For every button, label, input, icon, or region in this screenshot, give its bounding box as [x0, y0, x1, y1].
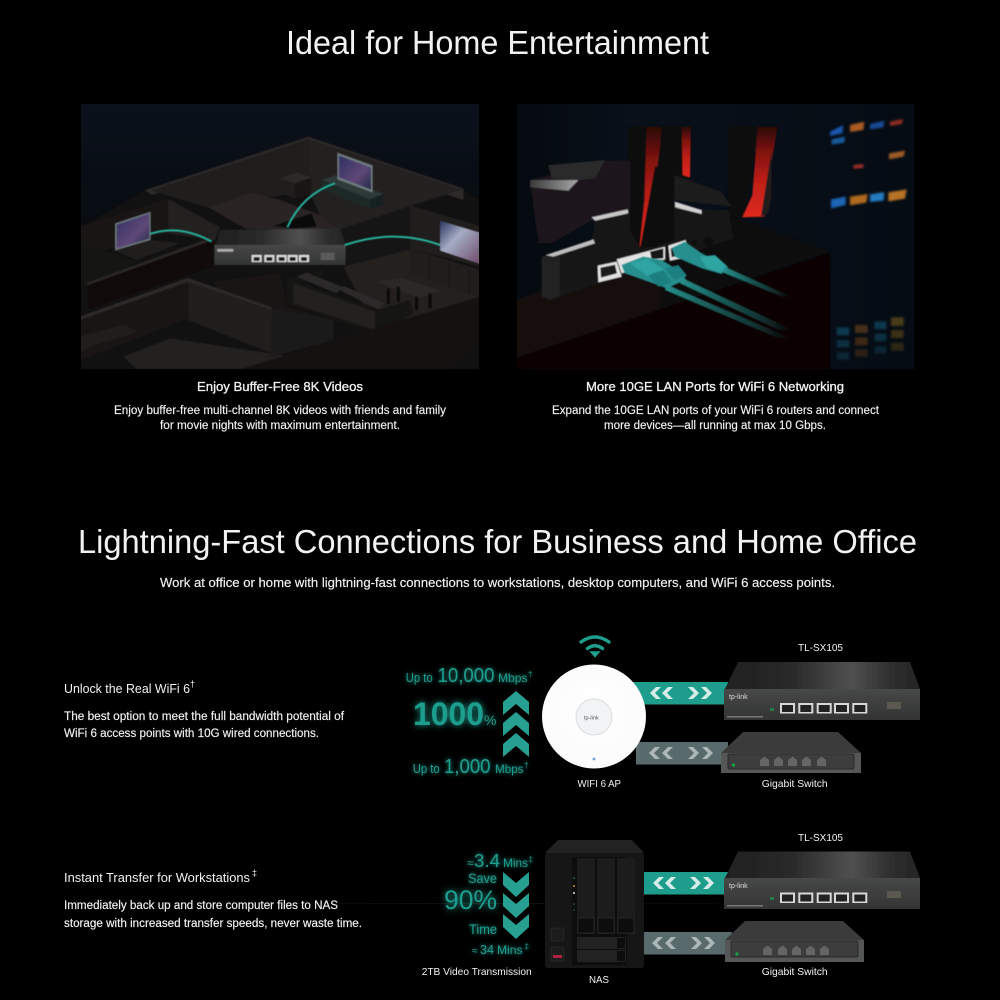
- stat: 1000 percent: %: [484, 712, 496, 728]
- stat: Save 90% Time: [444, 870, 497, 937]
- stat: Up to 1,000 Mbps: 1,000: [444, 756, 490, 778]
- stat: Up to 1,000 Mbps: Mbps: [495, 762, 524, 776]
- stat: 34 Mins: [472, 942, 529, 957]
- caption: More 10GE LAN Ports: More 10GE LAN Ports for WiFi 6 Networking: [586, 380, 844, 394]
- stat: 1000 percent: 1000: [413, 696, 484, 732]
- text block: Unlock the Real WiFi 6: Unlock the Real WiFi 6: [64, 682, 190, 696]
- label: 2TB Video Transmission: 2TB Video Transmission: [422, 966, 532, 978]
- icon: triple down chevrons: [503, 872, 529, 939]
- link bar: 10G teal: [632, 682, 728, 704]
- stat: 3.4 Mins: 3.4: [474, 851, 500, 871]
- icon: triple up chevrons: [503, 691, 529, 757]
- text block: Instant Transfer for Workstations: ‡: [252, 868, 257, 878]
- text block: Instant Transfer for Workstations: Instant Transfer for Workstations: [64, 871, 250, 885]
- stat: Save 90% Time: 90%: [444, 885, 497, 915]
- caption: Enjoy Buffer-Free 8K Videos: Enjoy buffer-free multi-channel 8K videos with friends and family: [114, 405, 446, 417]
- stat: Up to 10,000 Mbps: Up to: [406, 671, 433, 685]
- device: TL-SX105 switch: [724, 662, 920, 720]
- stat: Save 90% Time: Time: [469, 921, 497, 937]
- device: WiFi 6 access point: tp-link: [584, 716, 599, 722]
- device: WiFi 6 access point: [542, 664, 646, 768]
- link bar: gigabit grey (NAS): [640, 932, 732, 954]
- device: TL-SX105 switch (second): tp-link: [729, 883, 748, 890]
- caption: Enjoy Buffer-Free 8K Videos: for movie nights with maximum entertainment.: [160, 420, 400, 432]
- caption: More 10GE LAN Ports: [552, 380, 880, 432]
- device: Gigabit switch (second): [725, 921, 864, 962]
- label: Gigabit Switch (second): Gigabit Switch: [762, 966, 828, 978]
- stat: Up to 1,000 Mbps: Up to: [413, 762, 440, 776]
- text block: Unlock the Real WiFi 6: The best option to meet the full bandwidth potential of: [64, 711, 345, 723]
- stat: 3.4 Mins: ‡: [528, 855, 533, 864]
- text block: Unlock the Real WiFi 6: †: [190, 679, 195, 689]
- caption: More 10GE LAN Ports: Expand the 10GE LAN ports of your WiFi 6 routers and connect: [552, 405, 880, 417]
- title: Ideal for Home Entertainment: Ideal for Home Entertainment: [286, 25, 710, 62]
- stat: 34 Mins: ≈: [472, 946, 478, 957]
- text block: Unlock the Real WiFi 6: WiFi 6 access points with 10G wired connections.: [64, 728, 319, 740]
- stat: 34 Mins: 34: [480, 943, 494, 957]
- label: WIFI 6 AP: WIFI 6 AP: [578, 778, 621, 790]
- device: TL-SX105 switch: tp-link: [729, 694, 748, 701]
- stat: Up to 1,000 Mbps: [413, 756, 528, 778]
- text block: Instant Transfer for Workstations: [64, 868, 362, 930]
- server rack lights: [830, 119, 907, 360]
- stat: Up to 10,000 Mbps: [406, 665, 532, 687]
- caption: More 10GE LAN Ports: more devices—all running at max 10 Gbps.: [604, 420, 826, 432]
- icon: wifi signal: [581, 637, 609, 656]
- caption: Enjoy Buffer-Free 8K Videos: Enjoy Buffer-Free 8K Videos: [197, 380, 363, 394]
- ethernet cables: [622, 242, 793, 338]
- label: Gigabit Switch: Gigabit Switch: [762, 778, 828, 790]
- link bar: 10G teal (NAS): [640, 872, 730, 894]
- device: NAS: [545, 840, 644, 968]
- panel: router with 10GE LAN cables: [515, 104, 914, 369]
- heading: Lightning-Fast Connections: Lightning-Fast Connections for Business and Home Office: [78, 523, 917, 560]
- label: TL-SX105: TL-SX105: [798, 642, 843, 654]
- text block: Unlock the Real WiFi 6: [64, 679, 345, 740]
- stat: Up to 10,000 Mbps: 10,000: [438, 665, 494, 687]
- stat: 34 Mins: Mins: [497, 943, 522, 957]
- stat: Save 90% Time: Save: [468, 870, 497, 886]
- stat: 3.4 Mins: [467, 851, 533, 871]
- text block: Instant Transfer for Workstations: storage with increased transfer speeds, never waste time.: [64, 918, 362, 930]
- panel: 3D home floor plan with switch: [80, 104, 480, 369]
- stat: Up to 1,000 Mbps: †: [524, 761, 528, 770]
- link bar: gigabit grey: [636, 742, 728, 764]
- stat: 3.4 Mins: Mins: [503, 856, 528, 870]
- label: TL-SX105 (second): TL-SX105: [798, 832, 843, 844]
- stat: 34 Mins: ‡: [524, 942, 529, 951]
- stat: Up to 10,000 Mbps: Mbps: [498, 671, 528, 685]
- subheading: Work at office or home with lightning-fast connections to workstations, desktop computers, and WiFi 6 access points.: [160, 576, 835, 590]
- device: Gigabit switch: [721, 732, 861, 773]
- stat: 3.4 Mins: ≈: [467, 856, 474, 870]
- text block: Instant Transfer for Workstations: Immediately back up and store computer files to NAS: [64, 900, 338, 912]
- caption: Enjoy Buffer-Free 8K Videos: [114, 380, 446, 432]
- device: TL-SX105 switch (second): [724, 852, 920, 909]
- stat: Up to 10,000 Mbps: †: [528, 670, 532, 679]
- label: NAS: NAS: [589, 974, 609, 986]
